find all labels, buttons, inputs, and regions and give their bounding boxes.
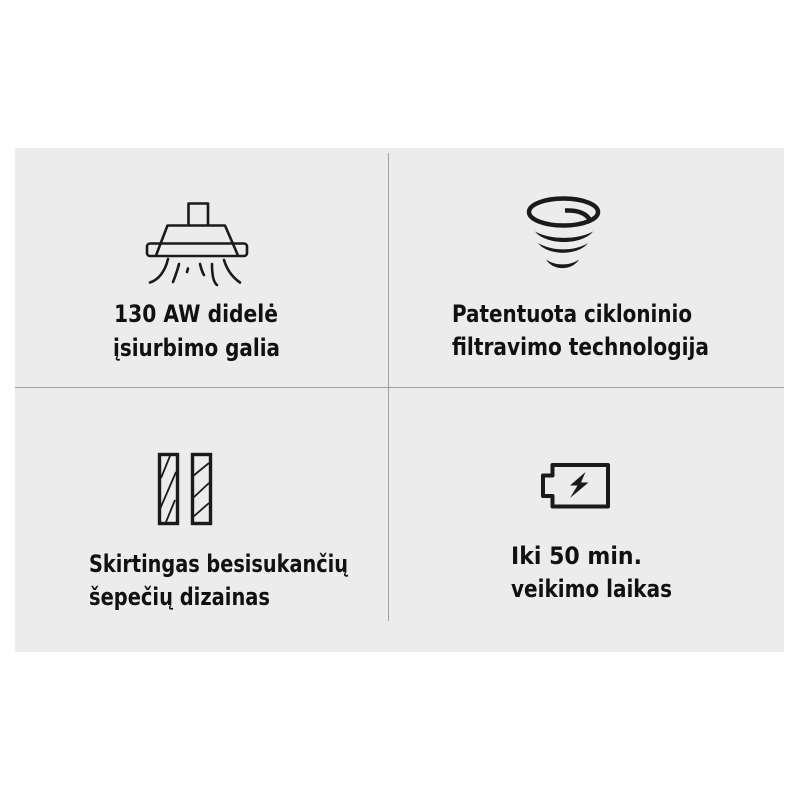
panel: feature grid background — [15, 148, 784, 652]
icon: suction hood — [147, 204, 247, 285]
icon: twin brushes — [160, 454, 210, 524]
icon: cyclone — [529, 198, 598, 268]
text: cyclonic filtration: filtravimo technologija — [452, 333, 709, 361]
text: brush design: šepečių dizainas — [89, 583, 270, 611]
text: run time: veikimo laikas — [511, 575, 672, 603]
text: cyclonic filtration: Patentuota cikloninio — [452, 300, 692, 328]
text: high suction power: 130 AW didelė — [114, 300, 278, 328]
text: high suction power: įsiurbimo galia — [113, 334, 280, 362]
text: brush design: Skirtingas besisukančių — [89, 550, 349, 578]
icon: battery charging — [543, 465, 608, 506]
text: run time: Iki 50 min. — [511, 542, 642, 570]
